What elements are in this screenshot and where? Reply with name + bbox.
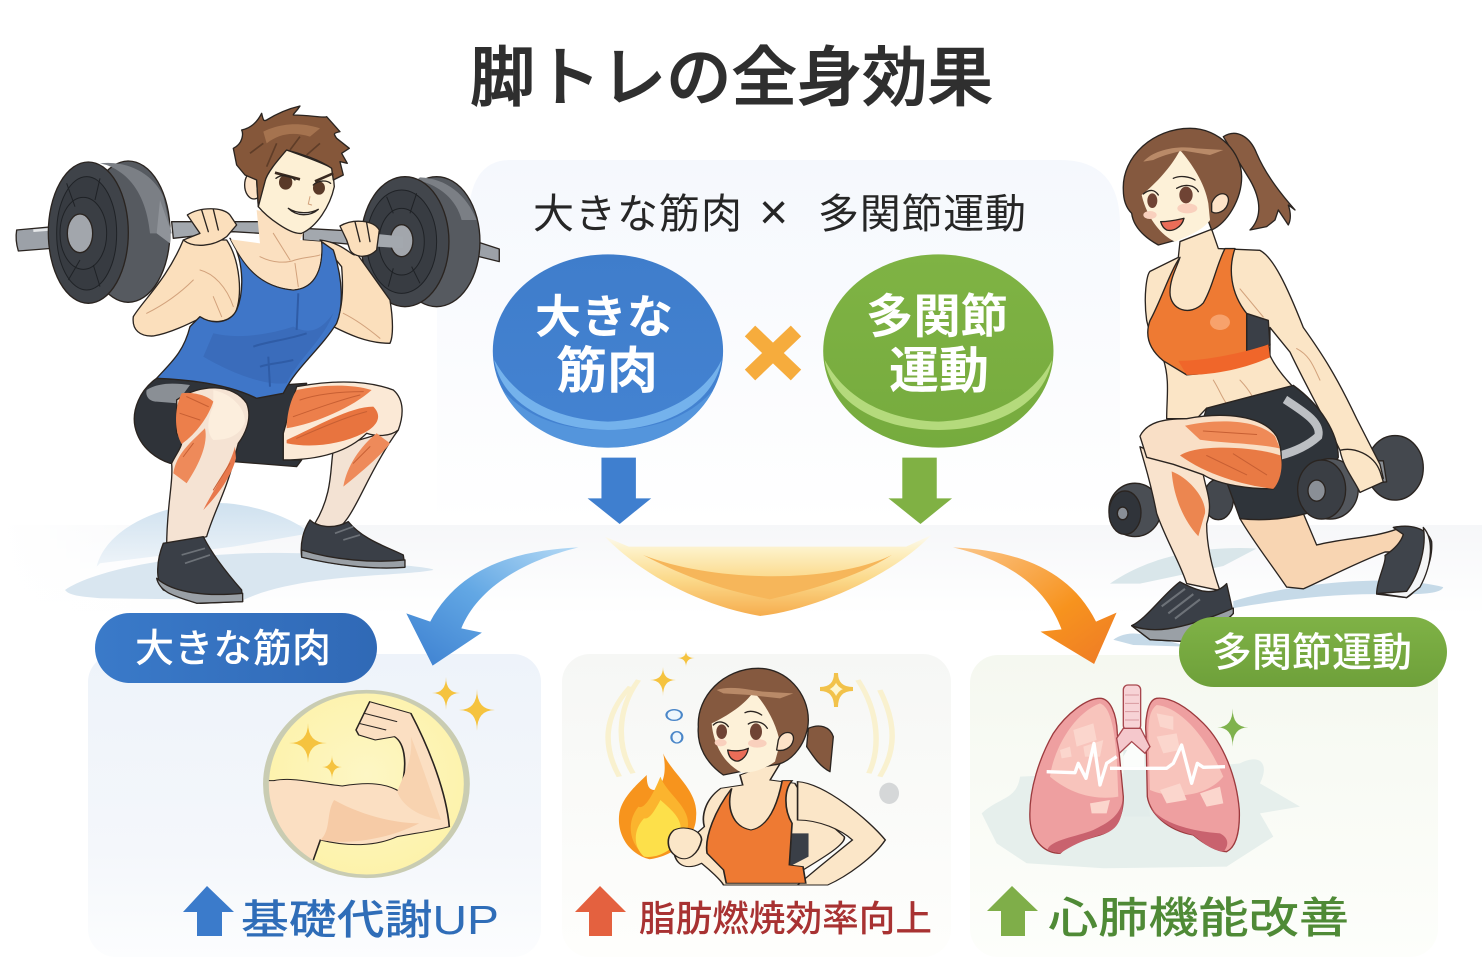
heartbeat line <box>1047 743 1225 785</box>
background band <box>0 525 1482 615</box>
ear <box>777 732 793 750</box>
middle woman head <box>698 668 833 775</box>
heading: multi-joint: 多関節運動 <box>818 191 1026 237</box>
mist <box>982 759 1300 868</box>
arrow: green down <box>888 458 952 524</box>
lungs <box>982 685 1300 868</box>
hands <box>183 209 379 256</box>
trachea <box>1117 685 1150 767</box>
calf muscle <box>1172 471 1205 536</box>
left leg <box>167 388 249 547</box>
cheek left <box>715 739 727 746</box>
orange multiply sign <box>750 331 796 375</box>
hair <box>698 668 808 775</box>
black shorts <box>1203 385 1338 520</box>
rear leg <box>1240 513 1407 589</box>
front dumbbell <box>1298 449 1383 519</box>
label: fat burning <box>575 886 932 939</box>
arm muscle lines <box>147 270 380 338</box>
mouth <box>1161 218 1184 230</box>
face <box>1142 150 1210 242</box>
ground shadow <box>1110 548 1443 647</box>
hair highlight <box>717 688 793 698</box>
front shoe <box>1132 582 1233 641</box>
face <box>712 692 780 773</box>
heading: times: × <box>759 184 788 240</box>
right leg <box>283 382 402 532</box>
orange top <box>707 781 809 883</box>
grey smudge <box>879 783 899 804</box>
label: fat burning: 脂肪燃焼効率向上 <box>639 898 932 939</box>
eye left <box>1147 193 1157 208</box>
panel: basal metabolism <box>88 654 541 957</box>
pill label: multi-joint <box>1179 617 1447 687</box>
blue disc: big muscles: 大きな <box>535 291 673 343</box>
raised arm <box>798 782 885 885</box>
flame <box>619 753 696 859</box>
eye right <box>750 723 762 740</box>
blue tank top <box>157 238 341 398</box>
sparkles: woman <box>650 651 853 707</box>
arrow: blue curve <box>406 547 578 666</box>
rear dumbbell plates <box>1109 436 1423 537</box>
panel: cardiopulmonary <box>970 655 1438 957</box>
panel: central formula <box>437 160 1120 525</box>
label: cardiopulmonary <box>987 886 1349 943</box>
lashes <box>713 711 767 728</box>
ponytail <box>807 726 833 772</box>
green disc: multi-joint <box>823 254 1053 448</box>
left lung <box>1030 698 1123 853</box>
blue disc: big muscles <box>493 254 723 448</box>
mouth <box>728 748 748 761</box>
pill label: multi-joint: 多関節運動 <box>1212 631 1412 675</box>
man doing barbell squat <box>16 106 499 603</box>
cheek right <box>748 739 767 748</box>
blush <box>1177 203 1197 213</box>
label: basal metabolism: 基礎代謝UP <box>241 897 499 943</box>
hair highlight <box>1143 147 1223 162</box>
thigh <box>1140 415 1282 489</box>
woman head <box>1123 128 1295 245</box>
arrow: orange curve <box>953 547 1117 664</box>
flow arrows and convergence <box>406 458 1117 666</box>
hair <box>1123 128 1242 245</box>
blue disc: big muscles: 筋肉 <box>556 343 658 399</box>
body <box>674 760 844 885</box>
sparkle: green <box>1217 708 1248 747</box>
label: cardiopulmonary: 心肺機能改善 <box>1048 895 1349 943</box>
flexed arm medallion <box>255 692 467 876</box>
lashes <box>1143 177 1198 195</box>
torso lines <box>1213 289 1320 408</box>
torso and arm skin <box>1145 229 1383 492</box>
head <box>233 106 349 233</box>
green disc: multi-joint: 多関節 <box>866 290 1008 343</box>
heading: big muscles: 大きな筋肉 <box>533 191 742 237</box>
pill label: big muscles: 大きな筋肉 <box>135 628 331 671</box>
ponytail <box>1223 133 1295 230</box>
shorts <box>134 378 307 467</box>
ground shadow <box>65 503 433 600</box>
pill label: big muscles <box>95 613 377 683</box>
woman doing dumbbell lunge <box>1109 229 1443 647</box>
barbell <box>16 161 499 307</box>
shoe laces <box>182 527 360 563</box>
right lung <box>1146 698 1239 852</box>
shoes <box>157 520 405 603</box>
panel: fat burning <box>562 654 951 957</box>
eye right <box>1179 187 1193 203</box>
white center <box>1123 750 1150 817</box>
green disc: multi-joint: 運動 <box>889 343 989 399</box>
cheek <box>1143 211 1157 219</box>
arms <box>133 240 392 343</box>
energy rays <box>608 680 892 777</box>
fist <box>668 828 702 859</box>
convergence lens <box>605 535 931 616</box>
formula heading <box>533 184 1026 240</box>
sparkles: arm <box>289 677 495 780</box>
label: basal metabolism <box>183 886 499 943</box>
title: 脚トレの全身効果 <box>470 41 993 114</box>
sweat drops <box>666 710 682 743</box>
ear <box>1212 194 1228 213</box>
lower front leg <box>1140 447 1220 591</box>
eye left <box>716 724 727 739</box>
arrow: blue down <box>588 458 651 524</box>
chest skin <box>231 210 321 289</box>
shoe laces <box>1162 589 1200 619</box>
woman with flame <box>608 680 899 885</box>
finger lines <box>202 209 370 242</box>
rear shoe <box>1377 526 1432 598</box>
orange sports bra <box>1148 249 1270 375</box>
